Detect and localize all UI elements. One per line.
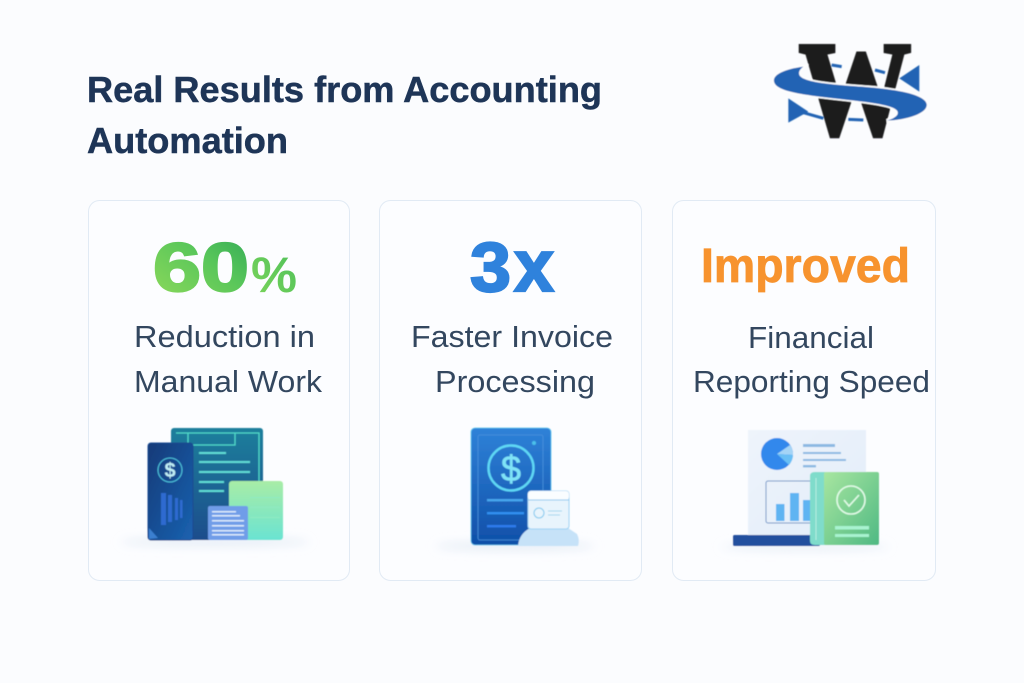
logo: W — [799, 15, 911, 163]
stat: 3x: 3 — [470, 228, 511, 306]
icon: invoice tablet and stamp: $ — [501, 448, 521, 489]
panel: improved financial reporting speed — [672, 200, 936, 580]
label: financial reporting speed: Reporting Speed — [693, 364, 930, 399]
title: Real Results from Accounting — [87, 69, 602, 110]
stat: 3x — [470, 226, 554, 307]
label: reduction in manual work — [134, 319, 323, 399]
icon: invoice tablet and stamp — [435, 428, 595, 550]
icon: documents and phone — [120, 428, 310, 546]
stat: improved: Improved — [701, 240, 910, 293]
title: Automation — [87, 120, 288, 161]
label: reduction in manual work: Manual Work — [134, 364, 323, 399]
label: reduction in manual work: Reduction in — [134, 319, 315, 354]
stat: 60%: % — [251, 247, 297, 303]
panel: 3x faster invoice processing — [380, 200, 642, 580]
stat: 60%: 60 — [153, 229, 249, 306]
label: financial reporting speed: Financial — [748, 320, 874, 355]
stat: 60% — [153, 229, 297, 306]
stat: 3x: x — [514, 226, 554, 307]
panel: 60% reduction in manual work — [88, 200, 350, 580]
title — [87, 69, 602, 161]
label: faster invoice processing: Faster Invoice — [411, 319, 613, 354]
label: faster invoice processing: Processing — [435, 364, 595, 399]
icon: report with charts and clipboard — [720, 430, 890, 550]
icon: documents and phone: $ — [164, 460, 176, 482]
label: financial reporting speed — [693, 320, 930, 399]
label: faster invoice processing — [411, 319, 613, 399]
